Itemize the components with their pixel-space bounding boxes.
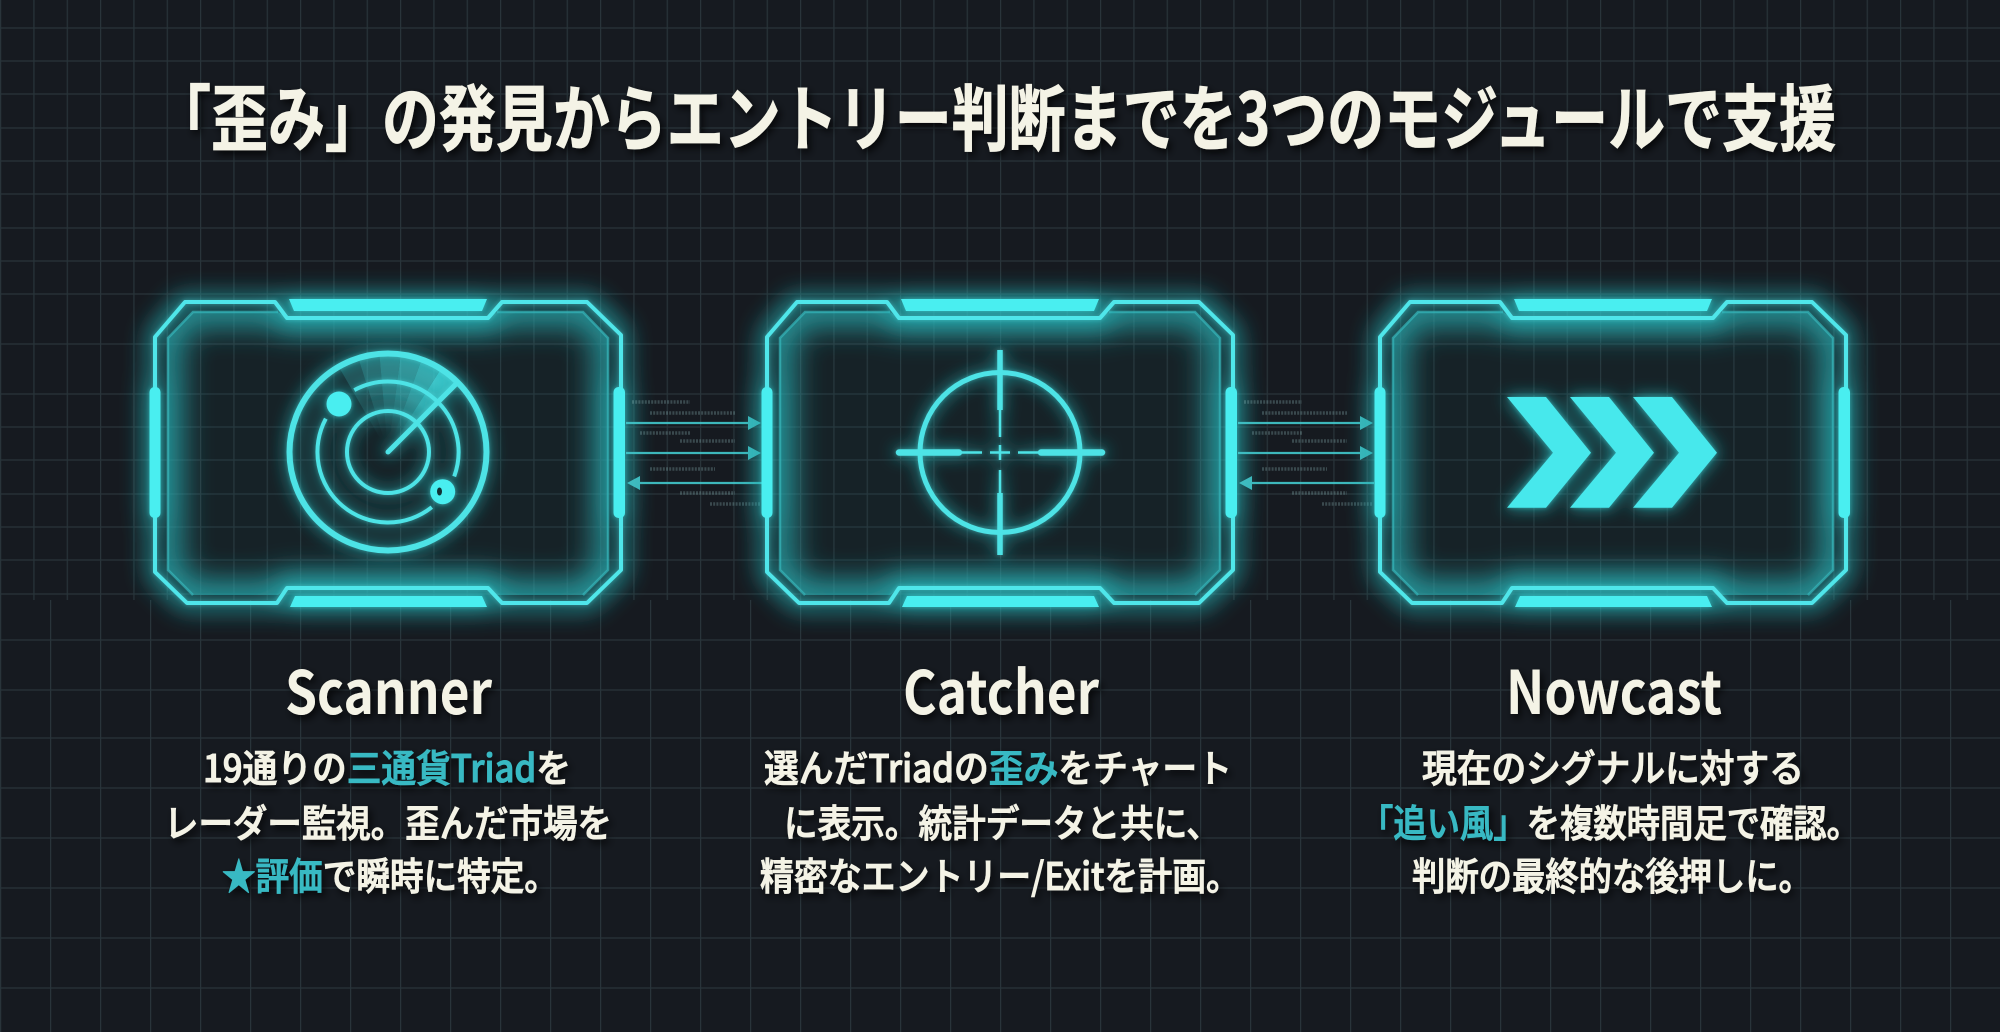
description: Scanner: レーダー監視。歪んだ市場を xyxy=(164,793,612,848)
frame: Nowcast xyxy=(1374,299,1850,607)
connector: Catcher to Nowcast xyxy=(1238,402,1374,504)
description: Catcher: 精密なエントリー/Exitを計画。 xyxy=(760,846,1240,901)
description: Catcher: 選んだTriadの歪みをチャート xyxy=(764,738,1232,793)
text: Scanner xyxy=(164,645,612,901)
heading: Catcher: Catcher xyxy=(903,645,1100,732)
description: Nowcast: 現在のシグナルに対する xyxy=(1422,738,1804,793)
text: Nowcast xyxy=(1360,645,1860,901)
heading: Nowcast: Nowcast xyxy=(1506,645,1722,732)
panel: Scanner xyxy=(150,299,625,607)
icon: triple chevron xyxy=(1507,397,1717,508)
description: Scanner xyxy=(164,738,612,901)
text: Catcher xyxy=(760,645,1240,901)
frame: Scanner xyxy=(150,299,625,607)
description: Scanner: ★評価で瞬時に特定。 xyxy=(222,846,558,901)
description: Catcher xyxy=(760,738,1240,901)
heading: Scanner: Scanner xyxy=(285,645,493,732)
icon: radar xyxy=(290,354,486,550)
icon: crosshair xyxy=(899,350,1102,555)
frame: Catcher xyxy=(762,299,1237,607)
panel: Nowcast xyxy=(1374,299,1850,607)
description: Scanner: 19通りの三通貨Triadを xyxy=(203,738,571,793)
description: Nowcast: 判断の最終的な後押しに。 xyxy=(1412,846,1812,901)
description: Nowcast xyxy=(1360,738,1860,901)
description: Nowcast: 「追い風」を複数時間足で確認。 xyxy=(1360,793,1860,848)
description: Catcher: に表示。統計データと共に、 xyxy=(784,793,1220,848)
connector: Scanner to Catcher xyxy=(626,402,762,504)
panel: Catcher xyxy=(762,299,1237,607)
